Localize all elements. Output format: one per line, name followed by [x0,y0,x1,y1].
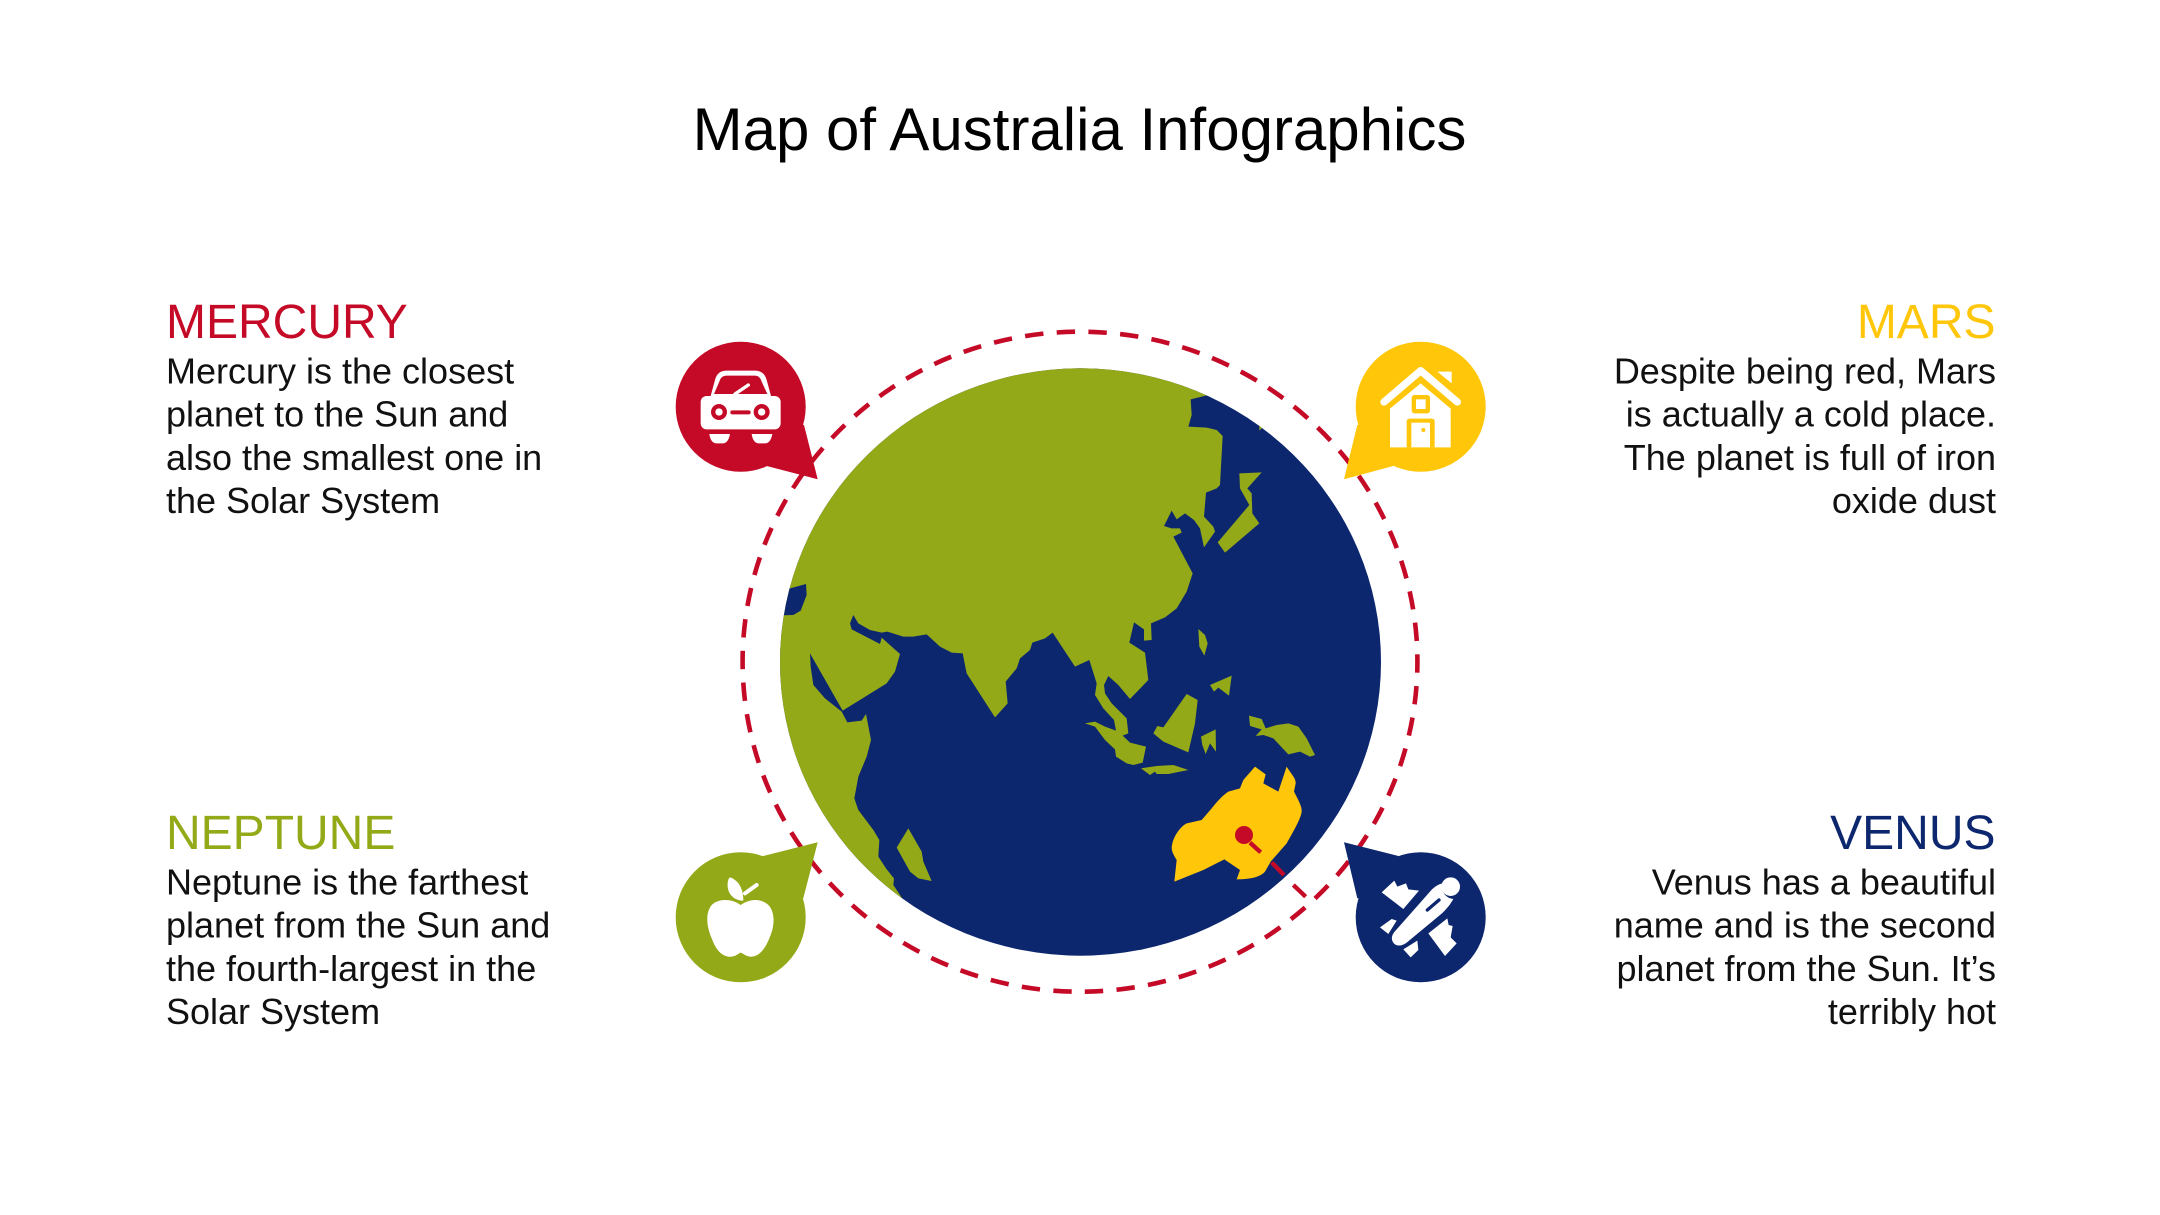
body: Mercury: planet to the Sun and [166,394,508,435]
icon: house [1384,371,1457,447]
Australia [1172,767,1306,897]
icon: car [701,371,781,443]
icon: airplane [1380,877,1460,957]
land masses [780,368,1315,898]
bubble: airplane [1344,842,1486,982]
Borneo [1153,694,1198,752]
body: Mars: is actually a cold place. [1626,394,1996,435]
Java [1141,765,1188,775]
heading: Mercury: MERCURY [166,296,408,349]
body: Neptune: Solar System [166,991,380,1032]
body: Neptune: the fourth-largest in the [166,948,536,989]
bubble: house [1344,342,1486,479]
Japan and Kamchatka [1218,426,1262,552]
heading: Neptune: NEPTUNE [166,807,395,860]
Taiwan [1198,629,1208,656]
New Guinea [1249,716,1315,757]
Sulawesi [1201,729,1216,754]
text block: Mars [1614,296,1996,521]
Madagascar [897,828,932,881]
body: Mercury: the Solar System [166,480,440,521]
icon: apple [707,877,774,957]
Caspian Sea [784,584,807,616]
ocean [780,368,1381,956]
dashed ring around globe [743,332,1417,992]
body: Neptune: Neptune is the farthest [166,862,528,902]
body: Mercury: also the smallest one in [166,437,542,478]
text block: Venus [1614,807,1996,1032]
location pin [1235,826,1306,897]
body: Venus: name and is the second [1614,905,1996,946]
title: Map of Australia Infographics [693,96,1466,163]
Southeast Asia islands [1141,629,1315,775]
heading: Mars: MARS [1857,296,1996,349]
body: Mars: oxide dust [1832,480,1996,521]
body: Mercury: Mercury is the closest [166,350,514,392]
globe with continents [780,368,1381,956]
heading: Venus: VENUS [1830,807,1996,860]
body: Mars: The planet is full of iron [1624,437,1996,478]
bubble: car [676,342,818,479]
bubble: apple [676,842,818,982]
text block: Neptune [166,807,550,1032]
text block: Mercury [166,296,542,521]
body: Mars: Despite being red, Mars [1614,350,1996,392]
body: Venus: Venus has a beautiful [1652,862,1996,902]
body: Venus: terribly hot [1828,991,1996,1032]
Philippines [1210,676,1232,696]
body: Venus: planet from the Sun. It’s [1616,948,1996,989]
body: Neptune: planet from the Sun and [166,905,550,946]
